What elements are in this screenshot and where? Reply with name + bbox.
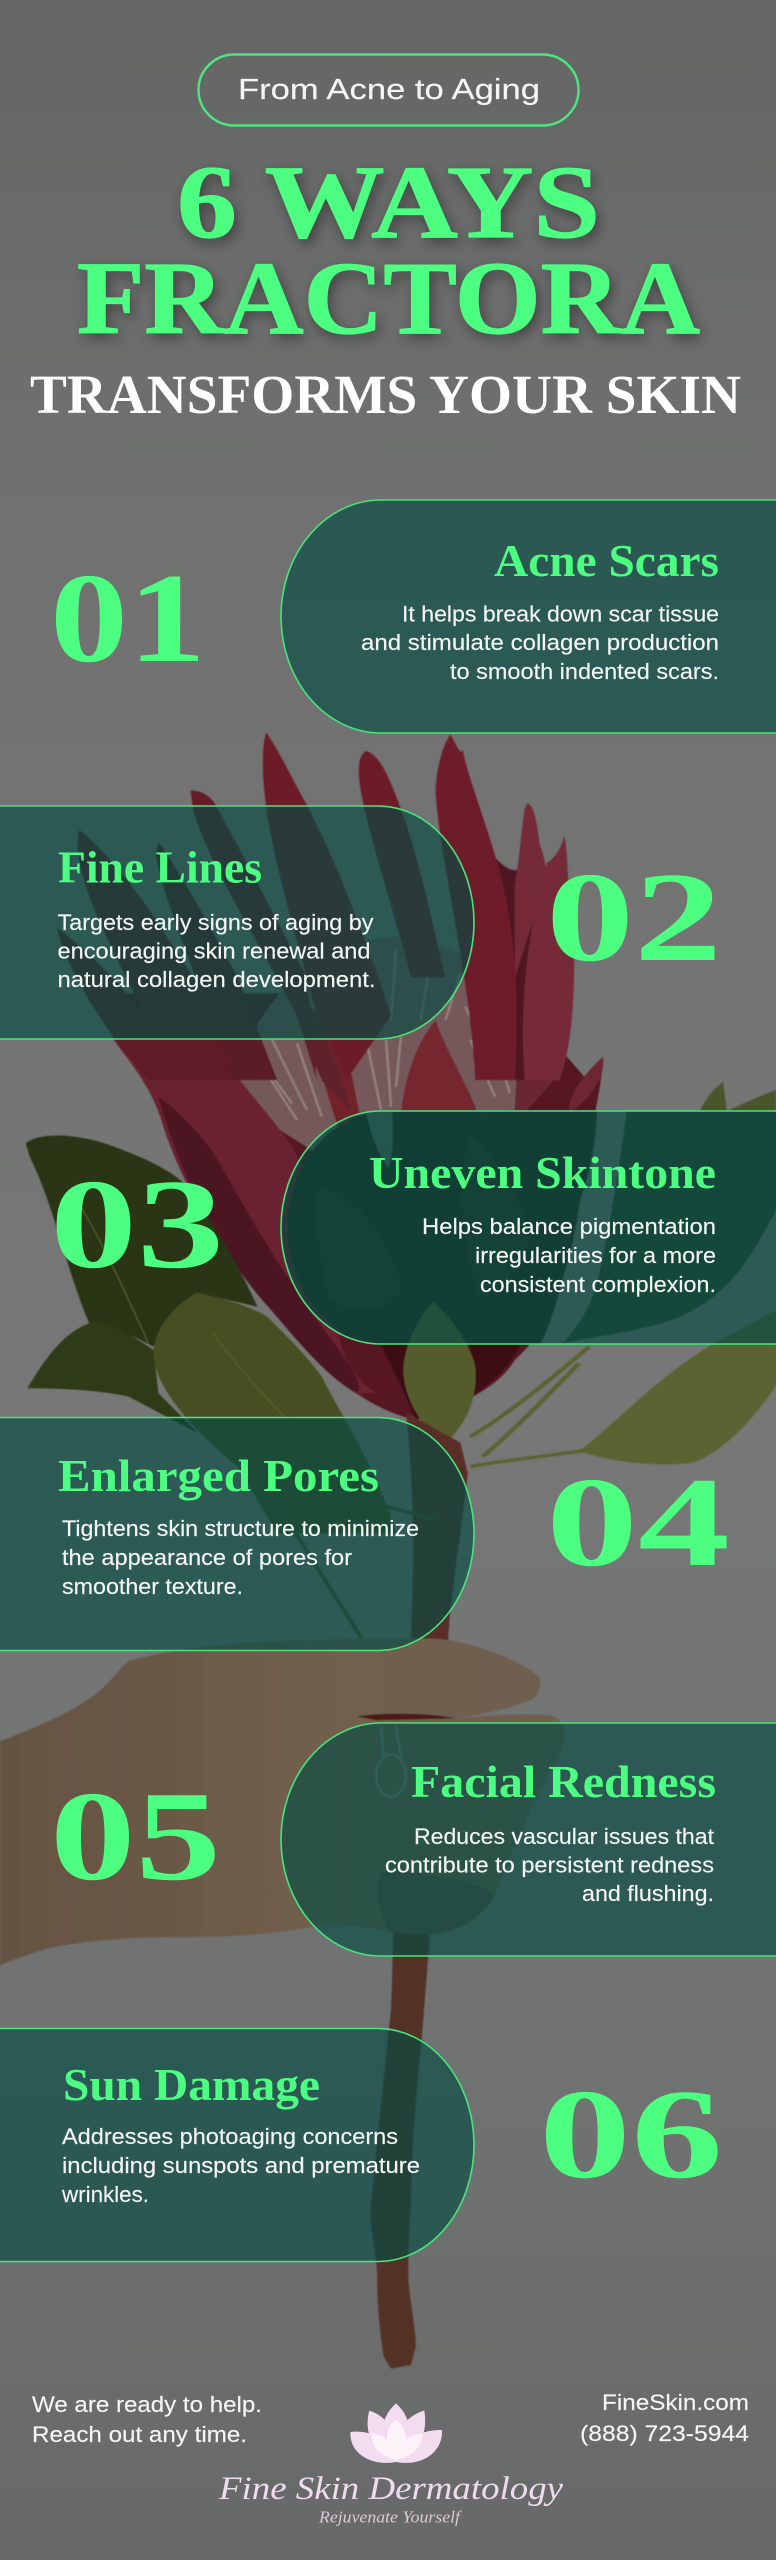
body: acne scars: to smooth indented scars. bbox=[450, 659, 719, 684]
heading: facial redness: Facial Redness bbox=[411, 1757, 716, 1807]
body: sun damage: wrinkles. bbox=[61, 2182, 149, 2207]
body: acne scars bbox=[361, 602, 719, 684]
body: enlarged pores: the appearance of pores for bbox=[62, 1545, 353, 1570]
body: acne scars: It helps break down scar tissue bbox=[402, 602, 719, 626]
body: fine lines bbox=[58, 910, 376, 992]
number 04: 04 bbox=[546, 1451, 730, 1593]
icon: lotus logo bbox=[350, 2403, 442, 2463]
body: uneven skintone bbox=[422, 1214, 716, 1297]
body: uneven skintone: Helps balance pigmentation bbox=[422, 1214, 716, 1239]
panel: enlarged pores bbox=[0, 1418, 474, 1650]
footer call to action: Reach out any time. bbox=[32, 2422, 247, 2447]
body: acne scars: and stimulate collagen production bbox=[361, 630, 719, 655]
body: fine lines: natural collagen development. bbox=[58, 967, 376, 992]
body: facial redness: Reduces vascular issues that bbox=[414, 1824, 715, 1849]
number 01: 01 bbox=[50, 547, 206, 689]
body: enlarged pores bbox=[62, 1516, 419, 1599]
body: facial redness: and flushing. bbox=[582, 1881, 714, 1906]
pill text: From Acne to Aging bbox=[238, 74, 540, 106]
flower upper petals bbox=[57, 733, 574, 1111]
number 03: 03 bbox=[50, 1153, 224, 1295]
number 02: 02 bbox=[546, 846, 722, 988]
body: enlarged pores: Tightens skin structure to minimize bbox=[62, 1516, 419, 1541]
body: sun damage bbox=[61, 2124, 420, 2207]
number 06: 06 bbox=[539, 2063, 723, 2205]
panel: fine lines bbox=[0, 806, 474, 1039]
panel: sun damage bbox=[0, 2028, 474, 2262]
heading: enlarged pores: Enlarged Pores bbox=[58, 1451, 379, 1501]
logo wordmark: Fine Skin Dermatology bbox=[218, 2471, 563, 2507]
footer contact details: (888) 723-5944 bbox=[580, 2421, 749, 2446]
heading: sun damage: Sun Damage bbox=[63, 2060, 320, 2110]
heading: fine lines: Fine Lines bbox=[58, 842, 262, 892]
leaves bbox=[26, 1136, 776, 1533]
title line 3: TRANSFORMS YOUR SKIN bbox=[30, 364, 741, 425]
photo: protea flower held in a hand bbox=[0, 733, 776, 2368]
footer contact details bbox=[580, 2390, 749, 2446]
body: enlarged pores: smoother texture. bbox=[62, 1574, 243, 1599]
heading: acne scars: Acne Scars bbox=[494, 536, 719, 586]
footer contact details: FineSkin.com bbox=[602, 2390, 749, 2415]
footer call to action: We are ready to help. bbox=[32, 2392, 262, 2417]
body: sun damage: including sunspots and premature bbox=[62, 2153, 420, 2178]
right leaves behind panel 3 bbox=[563, 1082, 776, 1343]
panel: acne scars bbox=[281, 500, 776, 733]
heading: uneven skintone: Uneven Skintone bbox=[369, 1148, 716, 1198]
title line 1: 6 WAYS bbox=[177, 145, 600, 260]
body: facial redness: contribute to persistent redness bbox=[385, 1852, 714, 1878]
flower body bbox=[99, 937, 603, 1420]
panel: facial redness bbox=[281, 1723, 776, 1956]
panel: uneven skintone bbox=[281, 1111, 776, 1344]
pill outline bbox=[198, 54, 578, 126]
body: sun damage: Addresses photoaging concerns bbox=[62, 2124, 398, 2149]
pill tag bbox=[198, 54, 578, 126]
title bbox=[30, 145, 741, 425]
body: uneven skintone: irregularities for a more bbox=[475, 1243, 716, 1268]
body: fine lines: encouraging skin renewal and bbox=[58, 938, 371, 964]
body: fine lines: Targets early signs of aging by bbox=[58, 910, 374, 935]
body: facial redness bbox=[385, 1824, 715, 1906]
number 05: 05 bbox=[50, 1765, 221, 1907]
title line 2: FRACTORA bbox=[77, 241, 700, 356]
footer call to action bbox=[32, 2392, 262, 2447]
body: uneven skintone: consistent complexion. bbox=[480, 1272, 716, 1297]
stem bbox=[272, 1412, 468, 2368]
hand bbox=[0, 1639, 565, 1965]
logo tagline: Rejuvenate Yourself bbox=[318, 2508, 462, 2526]
flower dark bracts behind panel 3 bbox=[288, 1112, 597, 1344]
